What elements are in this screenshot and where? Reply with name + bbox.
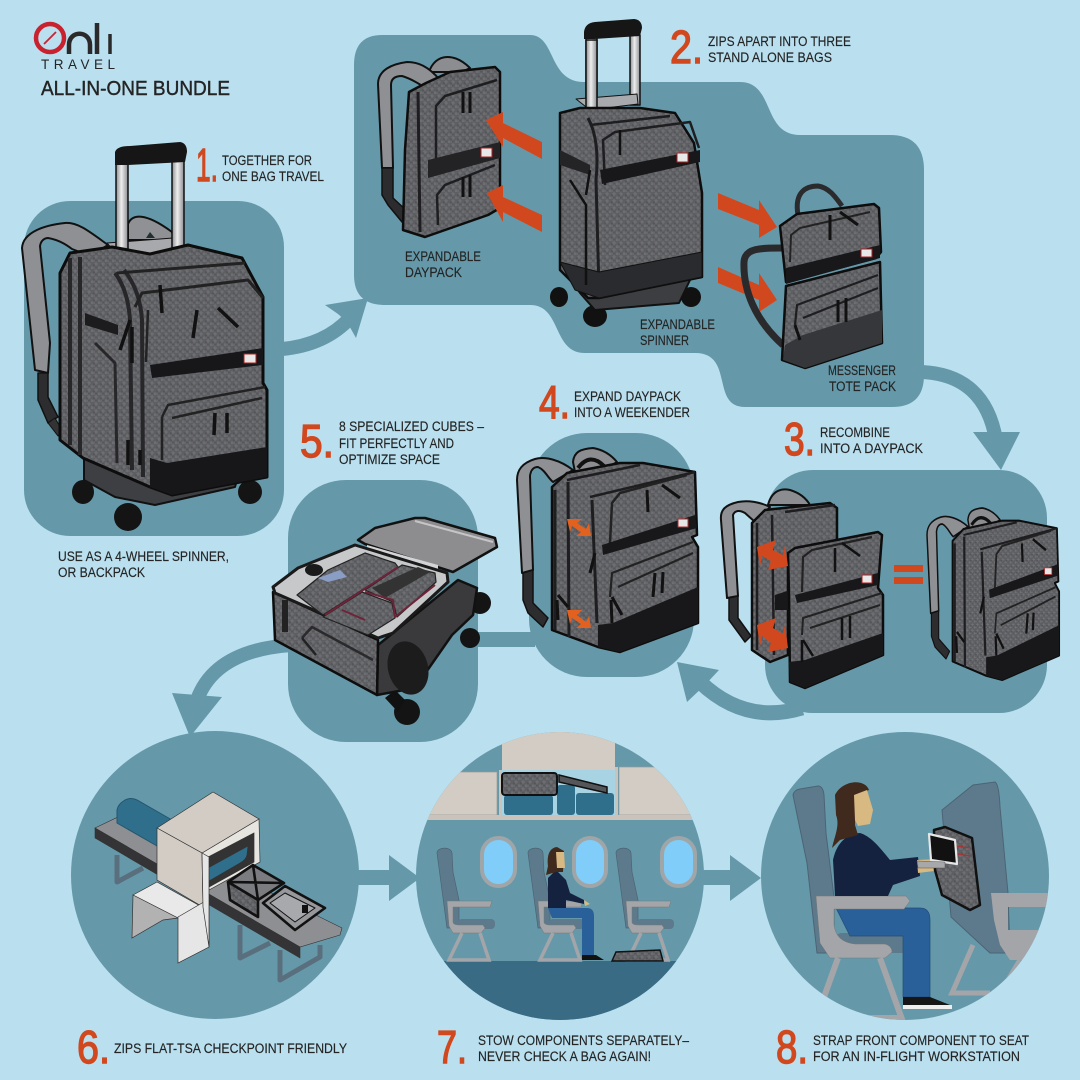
arrow: step 6 to step 7 — [358, 855, 420, 901]
logo: Onli Travel: TRAVEL — [41, 57, 115, 72]
face — [854, 790, 873, 826]
packing cubes — [297, 553, 436, 635]
flat opened bag on belt — [228, 865, 325, 930]
label: step 5: OPTIMIZE SPACE — [339, 452, 440, 467]
caption: expandable spinner — [640, 317, 715, 348]
illustration: open suitcase with packing cubes — [273, 518, 497, 725]
caption: messenger tote pack: MESSENGER — [828, 363, 896, 378]
title: ALL-IN-ONE BUNDLE — [41, 78, 230, 100]
caption: expandable daypack: EXPANDABLE — [405, 249, 481, 264]
connector: step 4 to step 5 — [475, 632, 535, 647]
caption: use as spinner or backpack: OR BACKPACK — [58, 565, 145, 580]
caption: expandable spinner: EXPANDABLE — [640, 317, 715, 332]
torso and arm — [833, 833, 920, 896]
label: step 7 — [437, 1021, 689, 1073]
label: step 6 — [77, 1021, 347, 1073]
backpack strap — [22, 223, 108, 436]
caption: use as spinner or backpack: USE AS A 4-WHEEL SPINNER, — [58, 549, 229, 564]
illustration: main bag on 4-wheel spinner — [22, 142, 267, 531]
seat 2 — [528, 848, 586, 960]
telescoping handle — [107, 142, 187, 256]
conveyor legs — [117, 855, 320, 980]
panel 1 background — [24, 201, 284, 536]
label: step 7: 7. — [437, 1021, 467, 1073]
arrow: step 5 to step 6 — [172, 645, 292, 737]
icon: expansion arrows on weekender — [567, 519, 591, 628]
circle 6: TSA checkpoint scene — [71, 731, 359, 1019]
label: step 2: STAND ALONE BAGS — [708, 50, 832, 65]
arrow: step 1 to step 2 — [282, 298, 368, 349]
label: step 1: 1. — [196, 139, 218, 191]
conveyor belt — [95, 817, 342, 958]
interior rim — [273, 545, 448, 638]
label: step 4: 4. — [539, 376, 570, 428]
label: step 7: NEVER CHECK A BAG AGAIN! — [478, 1049, 651, 1064]
jeans — [836, 908, 930, 997]
label: step 3 — [784, 413, 923, 465]
illustration: expandable spinner — [550, 19, 702, 327]
arrow: step 7 to step 8 — [703, 855, 761, 901]
front seat back — [942, 782, 1010, 953]
label: step 8: 8. — [776, 1021, 808, 1073]
label: step 4: INTO A WEEKENDER — [574, 405, 690, 420]
arrows: daypack separates — [486, 112, 542, 232]
label: step 4: EXPAND DAYPACK — [574, 389, 681, 404]
small passenger — [546, 847, 604, 960]
shoe — [903, 997, 952, 1009]
logo: Onli Travel — [36, 23, 115, 72]
bag on floor — [612, 950, 663, 961]
label: step 3: 3. — [784, 413, 815, 465]
panel 4 background — [529, 433, 694, 677]
arrow: step 2 to step 3 — [922, 372, 1020, 470]
caption: use as spinner or backpack — [58, 549, 229, 580]
label: step 1: TOGETHER FOR — [222, 153, 312, 168]
label: step 4 — [539, 376, 690, 428]
caption: messenger tote pack — [828, 363, 896, 394]
front seat frame — [952, 945, 1020, 993]
dark end face — [377, 580, 477, 695]
label: step 8 — [776, 1021, 1029, 1073]
rear seat back — [793, 786, 834, 953]
body — [60, 245, 267, 495]
packed items — [305, 564, 347, 582]
circle 7: cabin scene — [415, 732, 705, 1021]
seat 1 — [437, 848, 495, 960]
illustration: expanded weekender backpack — [517, 448, 698, 652]
wheels — [469, 592, 491, 614]
tweed side face — [273, 592, 378, 695]
label: step 5: FIT PERFECTLY AND — [339, 436, 454, 451]
label: step 1: ONE BAG TRAVEL — [222, 169, 324, 184]
label: step 3: RECOMBINE — [820, 425, 890, 440]
window 3 — [662, 838, 695, 886]
label: step 5: 5. — [300, 415, 334, 467]
window 1 — [482, 838, 515, 886]
caption: expandable daypack: DAYPACK — [405, 265, 462, 280]
caption: messenger tote pack: TOTE PACK — [829, 379, 896, 394]
illustration: recombined daypack — [927, 508, 1059, 680]
caption: expandable daypack — [405, 249, 481, 280]
label: step 7: STOW COMPONENTS SEPARATELY– — [478, 1033, 689, 1048]
x-ray machine — [132, 792, 260, 963]
hand — [917, 860, 934, 873]
label: step 5 — [300, 415, 484, 467]
seat legs — [820, 958, 903, 1022]
hair — [832, 782, 869, 848]
panel 2 background — [354, 35, 924, 407]
arrows: messenger pack separates — [718, 193, 777, 312]
strapped bag with tablet — [917, 827, 980, 910]
label: step 3: INTO A DAYPACK — [820, 441, 923, 456]
floor — [444, 961, 676, 1020]
illustration: daypack and messenger recombining — [721, 489, 883, 688]
icon: recombine arrows — [757, 540, 788, 652]
arrow: step 3 to step 4 — [677, 662, 802, 713]
seat frame — [816, 896, 910, 958]
label: step 8: FOR AN IN-FLIGHT WORKSTATION — [813, 1049, 1020, 1064]
label: step 2: ZIPS APART INTO THREE — [708, 34, 851, 49]
front tote — [788, 532, 883, 688]
icon: equals sign — [894, 565, 923, 584]
blue bag entering scanner — [117, 798, 172, 846]
label: step 8: STRAP FRONT COMPONENT TO SEAT — [813, 1033, 1029, 1048]
panel 5 background — [288, 480, 478, 742]
illustration: expandable daypack — [378, 57, 500, 237]
label: step 6: ZIPS FLAT-TSA CHECKPOINT FRIENDLY — [114, 1041, 347, 1056]
label: step 6: 6. — [77, 1021, 110, 1073]
lid — [358, 518, 497, 572]
front seat arm — [991, 893, 1050, 960]
cushion — [838, 933, 903, 953]
seat 3 — [616, 848, 674, 960]
wheels and base — [72, 458, 262, 531]
label: step 5: 8 SPECIALIZED CUBES – — [339, 419, 484, 434]
window 2 — [574, 838, 606, 886]
label: step 1 — [196, 139, 324, 191]
overhead bins — [415, 732, 705, 820]
caption: expandable spinner: SPINNER — [640, 333, 689, 348]
illustration: messenger tote pack — [744, 186, 882, 368]
label: step 2: 2. — [670, 21, 703, 73]
label: step 2 — [670, 21, 851, 73]
panel 3 background — [765, 470, 1047, 713]
circle 8: in-flight workstation — [761, 732, 1050, 1022]
back daypack — [721, 489, 837, 662]
